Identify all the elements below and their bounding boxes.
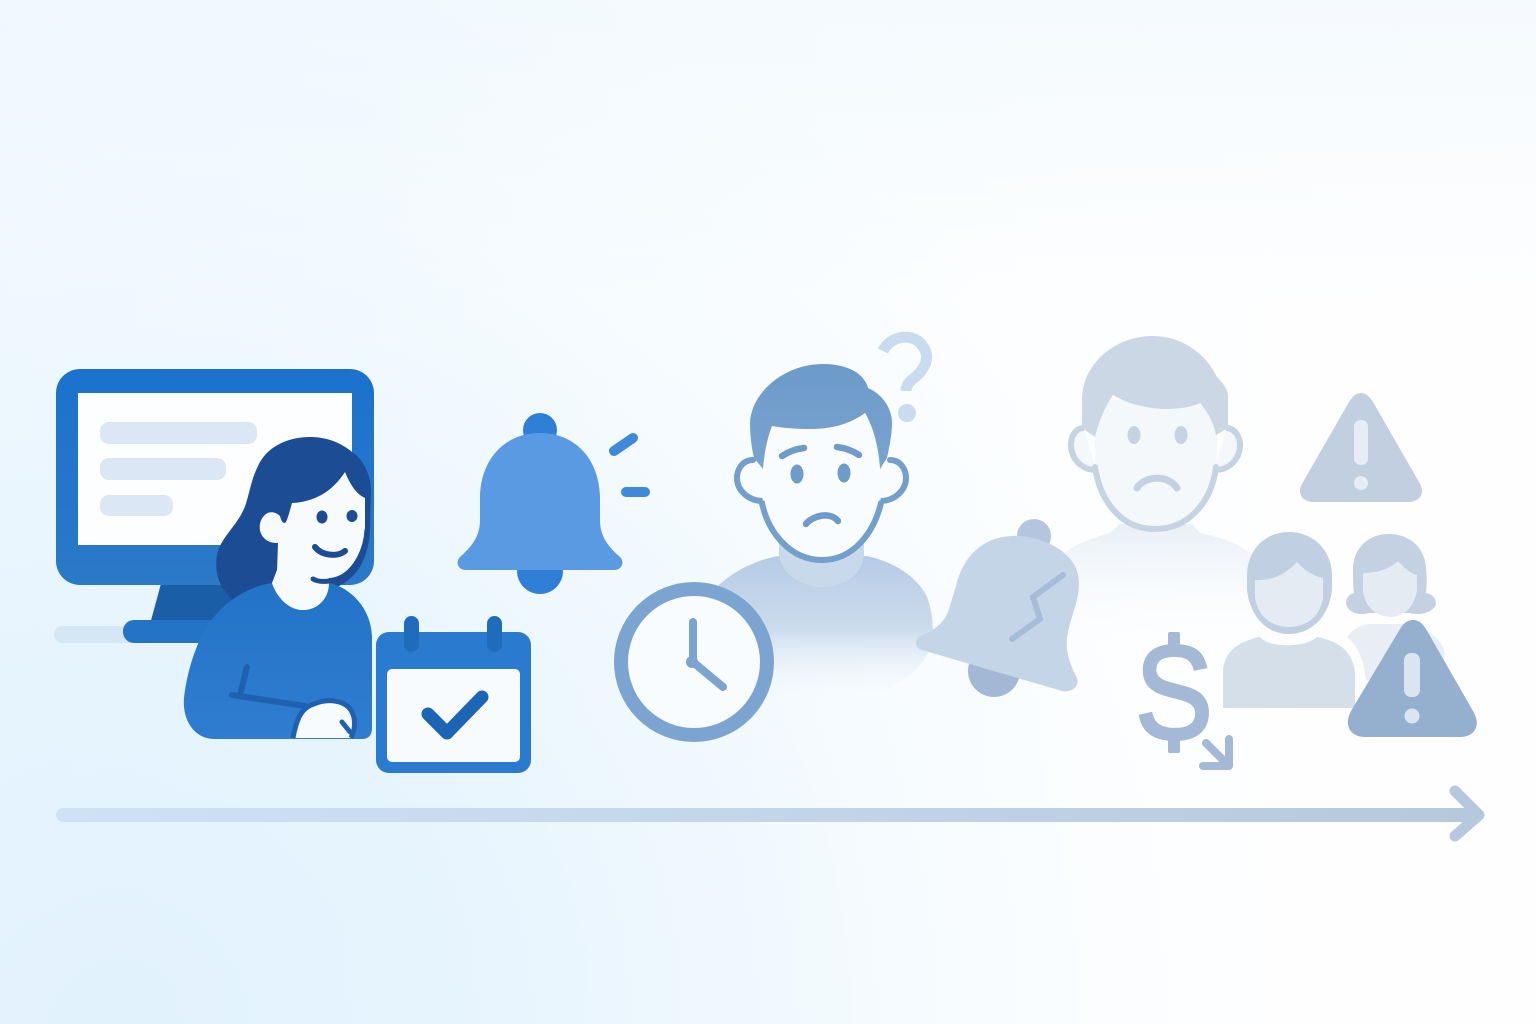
icon: lower warning triangle xyxy=(1348,620,1477,737)
ears xyxy=(1071,428,1096,470)
face xyxy=(1095,400,1217,529)
arm xyxy=(232,667,305,706)
worried man xyxy=(712,364,933,700)
icon: broken bell xyxy=(916,519,1079,697)
body xyxy=(184,583,372,739)
icon: upper warning triangle xyxy=(1300,393,1422,502)
icon: question mark xyxy=(883,337,927,422)
face details xyxy=(316,510,328,524)
icon: clock xyxy=(621,589,767,735)
neck xyxy=(779,540,864,587)
brows, eyes, mouth xyxy=(782,448,804,456)
woman at computer xyxy=(184,437,372,739)
hair xyxy=(216,437,371,600)
icon: calendar with check xyxy=(376,616,531,773)
hair xyxy=(750,364,892,469)
icon: falling dollar: S xyxy=(1135,619,1213,767)
front person in group xyxy=(1223,532,1355,708)
neck lower xyxy=(272,570,329,610)
body xyxy=(712,556,933,700)
face xyxy=(762,420,881,560)
icon: computer monitor xyxy=(54,369,374,643)
timeline arrow xyxy=(56,791,1479,836)
face and neck xyxy=(260,472,365,584)
faded man xyxy=(1054,336,1262,640)
body xyxy=(1054,524,1262,640)
jaw line xyxy=(313,530,367,581)
hair xyxy=(1082,336,1228,437)
ears xyxy=(737,460,763,501)
back woman in group xyxy=(1346,534,1445,680)
icon: bright bell xyxy=(458,413,645,594)
hand xyxy=(293,701,355,738)
